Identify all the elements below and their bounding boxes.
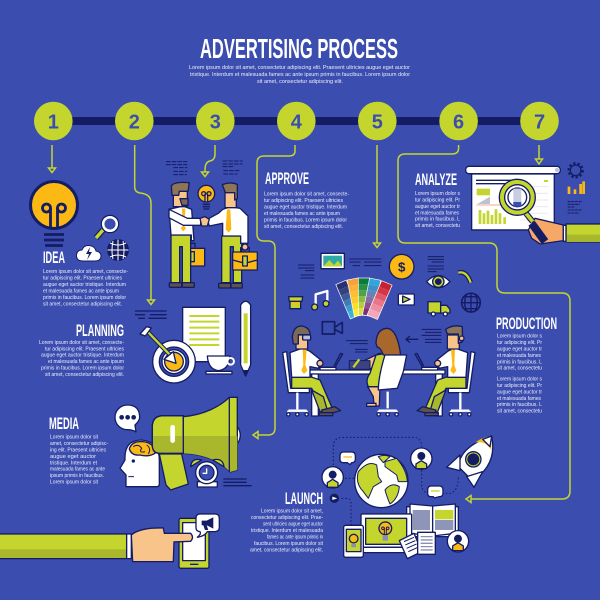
step number circles: 5 bbox=[372, 111, 383, 133]
target bbox=[140, 327, 195, 383]
text: media: Lorem ipsum dolor sit bbox=[50, 480, 98, 486]
tablet bbox=[344, 525, 363, 557]
text: launch: sent ultricies augue eget auctor bbox=[263, 522, 323, 528]
text: media bbox=[50, 434, 108, 486]
illustration: launch network bbox=[322, 436, 493, 559]
hand holding magnifier bbox=[499, 179, 563, 244]
step number circles bbox=[34, 102, 559, 140]
timeline bar bbox=[60, 117, 540, 125]
connector arrow 4 bbox=[253, 145, 295, 438]
phone icon fill bbox=[458, 272, 471, 283]
eye icon bbox=[427, 275, 450, 288]
intro text: sit amet, consectetur adipiscing elit. bbox=[257, 79, 343, 85]
hands bbox=[200, 217, 209, 226]
text: idea bbox=[43, 269, 128, 308]
intro text bbox=[189, 65, 410, 85]
right man seated bbox=[415, 326, 475, 416]
text: approve: et malesuada fames ac ante ipsum bbox=[264, 211, 340, 217]
connector arrow 7 bbox=[536, 145, 542, 164]
heading: idea: IDEA bbox=[43, 248, 65, 267]
text: media: ing elit. Praesent ultricies bbox=[50, 448, 106, 454]
step number circles: 1 bbox=[48, 111, 59, 133]
phone icon bbox=[458, 272, 471, 283]
globe bbox=[355, 454, 408, 508]
text: production: sit amet, consectetu bbox=[497, 408, 542, 414]
text: planning: tur adipiscing elit. Praesent ultricies bbox=[45, 346, 124, 352]
text: launch: tristique. Interdum et malesuada bbox=[251, 528, 324, 534]
connector arrow 5 bbox=[374, 145, 380, 248]
chat bubble left bbox=[340, 452, 355, 465]
text: launch bbox=[250, 508, 324, 554]
text: launch: consectetur adipiscing elit. Prae- bbox=[251, 515, 323, 521]
avatar bottom bbox=[447, 531, 469, 552]
avatar top bbox=[411, 448, 432, 469]
heading: launch: LAUNCH bbox=[285, 489, 323, 508]
step number circles: 6 bbox=[453, 111, 464, 133]
intro text: Lorem ipsum dolor sit amet, consectetur adipiscing elit. Praesent ultricies augue eget auctor bbox=[189, 65, 410, 71]
text: approve: primis in faucibus. Lorem ipsum dolor bbox=[264, 218, 347, 224]
paper bbox=[183, 307, 225, 362]
text: planning: et malesuada fames ac ante ipsum bbox=[48, 359, 124, 365]
note lines bbox=[223, 479, 252, 486]
phone bbox=[179, 518, 209, 568]
text: launch: amet, consectetur adipiscing elit. bbox=[250, 548, 323, 554]
speech bubble bbox=[115, 405, 140, 432]
music icon bbox=[312, 291, 329, 310]
illustration: meeting team bbox=[283, 253, 480, 416]
woman bbox=[349, 328, 407, 416]
laptop bbox=[361, 514, 415, 553]
truck icon bbox=[428, 302, 450, 316]
text: production: tur adipiscing elit. Pr bbox=[497, 383, 542, 389]
text: production: sit amet, consectetu bbox=[497, 366, 542, 372]
step number circles: 4 bbox=[291, 111, 303, 133]
note lines bbox=[166, 161, 243, 175]
connector arrow 2 bbox=[135, 145, 154, 304]
notification bubble bbox=[196, 514, 219, 537]
text: media: amet, consectetur adipisc- bbox=[50, 441, 108, 447]
text: media: ipsum primis in faucibus. bbox=[50, 473, 104, 479]
dotted routes bbox=[333, 437, 458, 525]
text: production bbox=[497, 334, 543, 414]
text: production: primis in faucibus. L bbox=[497, 360, 543, 366]
fan swatches bbox=[335, 277, 393, 320]
text: production: tur adipiscing elit. Pr bbox=[497, 340, 542, 346]
heading: media: MEDIA bbox=[49, 414, 79, 433]
gear icon bbox=[569, 163, 583, 177]
right briefcase bbox=[233, 244, 257, 270]
text: idea: Lorem ipsum dolor sit amet, consecte- bbox=[43, 269, 128, 275]
coffee cup bbox=[206, 356, 234, 374]
note lines bbox=[298, 257, 444, 352]
connector arrow 1 bbox=[48, 145, 56, 172]
mini bar chart bbox=[569, 181, 584, 194]
dollar coin bbox=[389, 254, 414, 279]
text: planning: primis in faucibus. Lorem ipsum dolor bbox=[41, 366, 124, 372]
text: media: augue eget auctor bbox=[50, 454, 96, 460]
text: analyze: Lorem ipsum dolor s bbox=[415, 191, 460, 197]
left man seated bbox=[283, 326, 343, 416]
text: media: tristique. Interdum et bbox=[50, 460, 97, 466]
heading: approve: APPROVE bbox=[265, 169, 309, 188]
text: media: Lorem ipsum dolor sit bbox=[50, 434, 98, 440]
text: production: augue eget auctor tr bbox=[497, 390, 542, 396]
text: production: Lorem ipsum dolor s bbox=[497, 334, 542, 340]
megaphone bbox=[152, 397, 240, 490]
icon: cloud bbox=[76, 245, 101, 261]
text: planning: sit amet, consectetur adipiscing elit. bbox=[45, 372, 124, 378]
chat bubble right bbox=[428, 486, 443, 498]
pencil bbox=[241, 301, 251, 376]
text: idea: augue eget auctor tristique. Interdum bbox=[43, 282, 126, 288]
sleeve bbox=[0, 534, 131, 559]
note lines bbox=[135, 311, 167, 318]
intro text: tristique. Interdum et malesuada fames ac ante ipsum primis in faucibus. Lorem ipsum dolor bbox=[190, 72, 410, 78]
text: production: primis in faucibus. L bbox=[497, 402, 543, 408]
text: approve: tur adipiscing elit. Praesent ultricies bbox=[264, 198, 343, 204]
presentation board bbox=[466, 166, 560, 230]
alarm clock bbox=[191, 459, 224, 487]
sleeve bbox=[563, 224, 600, 242]
text: analyze: et malesuada fames bbox=[415, 210, 459, 216]
avatar left bbox=[322, 467, 343, 488]
illustration: planning desk bbox=[135, 301, 251, 383]
text: analyze: sit amet, consectetu bbox=[415, 223, 460, 229]
text: approve bbox=[264, 192, 349, 230]
text: idea: primis in faucibus. Lorem ipsum dolor bbox=[43, 295, 126, 301]
text: analyze bbox=[415, 191, 461, 229]
left briefcase bbox=[189, 243, 205, 266]
camera icon bbox=[322, 322, 342, 334]
text: production: et malesuada fames bbox=[497, 396, 541, 402]
pointing hand bbox=[131, 528, 192, 562]
globe icon bbox=[462, 293, 480, 312]
handshake: two businessmen bbox=[166, 161, 257, 288]
shop icon bbox=[289, 297, 303, 309]
icon: globe bbox=[107, 239, 129, 261]
dollar coin: $ bbox=[398, 259, 406, 274]
play icon bbox=[398, 294, 414, 305]
icon: magnifier bbox=[96, 217, 117, 238]
text: production: augue eget auctor tr bbox=[497, 346, 542, 352]
picture icon bbox=[321, 253, 344, 269]
documents bbox=[399, 532, 435, 559]
text: approve: augue eget auctor tristique. Interdum bbox=[264, 204, 347, 210]
text: idea: tur adipiscing elit. Praesent ultricies bbox=[43, 276, 122, 282]
text: idea: et malesuada fames ac ante ipsum bbox=[43, 288, 119, 294]
title: ADVERTISING PROCESS bbox=[200, 33, 398, 64]
text: media: malesuada fames ac ante bbox=[50, 466, 105, 472]
text: planning bbox=[39, 340, 124, 378]
text: idea: sit amet, consectetur adipiscing elit. bbox=[43, 302, 122, 308]
text: analyze: augue eget auctor tr bbox=[415, 204, 460, 210]
connector arrow 6 bbox=[398, 145, 570, 502]
text: analyze: tur adipiscing elit. Pr bbox=[415, 198, 460, 204]
step number circles: 7 bbox=[534, 111, 545, 133]
connector arrow 3 bbox=[202, 145, 215, 176]
table bbox=[309, 370, 445, 416]
heading: analyze: ANALYZE bbox=[415, 170, 457, 189]
text: approve: sit amet, consectetur adipiscing elit. bbox=[264, 224, 343, 230]
left man bbox=[169, 182, 201, 287]
text: launch: Lorem ipsum dolor sit amet, bbox=[261, 508, 323, 514]
step number circles: 2 bbox=[129, 111, 140, 133]
heading: planning: PLANNING bbox=[76, 321, 124, 340]
text: production: et malesuada fames bbox=[497, 353, 541, 359]
text: analyze: primis in faucibus. L bbox=[415, 216, 461, 222]
note lines bbox=[568, 202, 582, 213]
small bulb bbox=[198, 185, 215, 209]
text: launch: fames ac ante ipsum primis in bbox=[267, 534, 323, 540]
right man bbox=[207, 183, 248, 288]
illustration: megaphone and phone hand bbox=[0, 397, 252, 568]
head with brain bbox=[120, 440, 159, 487]
icon: idea bulb bbox=[30, 182, 78, 246]
text: production: Lorem ipsum dolor s bbox=[497, 376, 542, 382]
illustration: analytics board bbox=[466, 163, 600, 244]
text: launch: faucibus. Lorem ipsum dolor sit bbox=[254, 541, 323, 547]
rocket bbox=[447, 436, 493, 487]
text: approve: Lorem ipsum dolor sit amet, consecte- bbox=[264, 192, 349, 198]
text: planning: Lorem ipsum dolor sit amet, consecte- bbox=[39, 340, 124, 346]
open book bbox=[407, 504, 458, 537]
small play dot bbox=[330, 494, 338, 502]
back arrow bbox=[406, 336, 418, 343]
step number circles: 3 bbox=[210, 111, 221, 133]
text: planning: augue eget auctor tristique. Interdum bbox=[41, 352, 124, 358]
